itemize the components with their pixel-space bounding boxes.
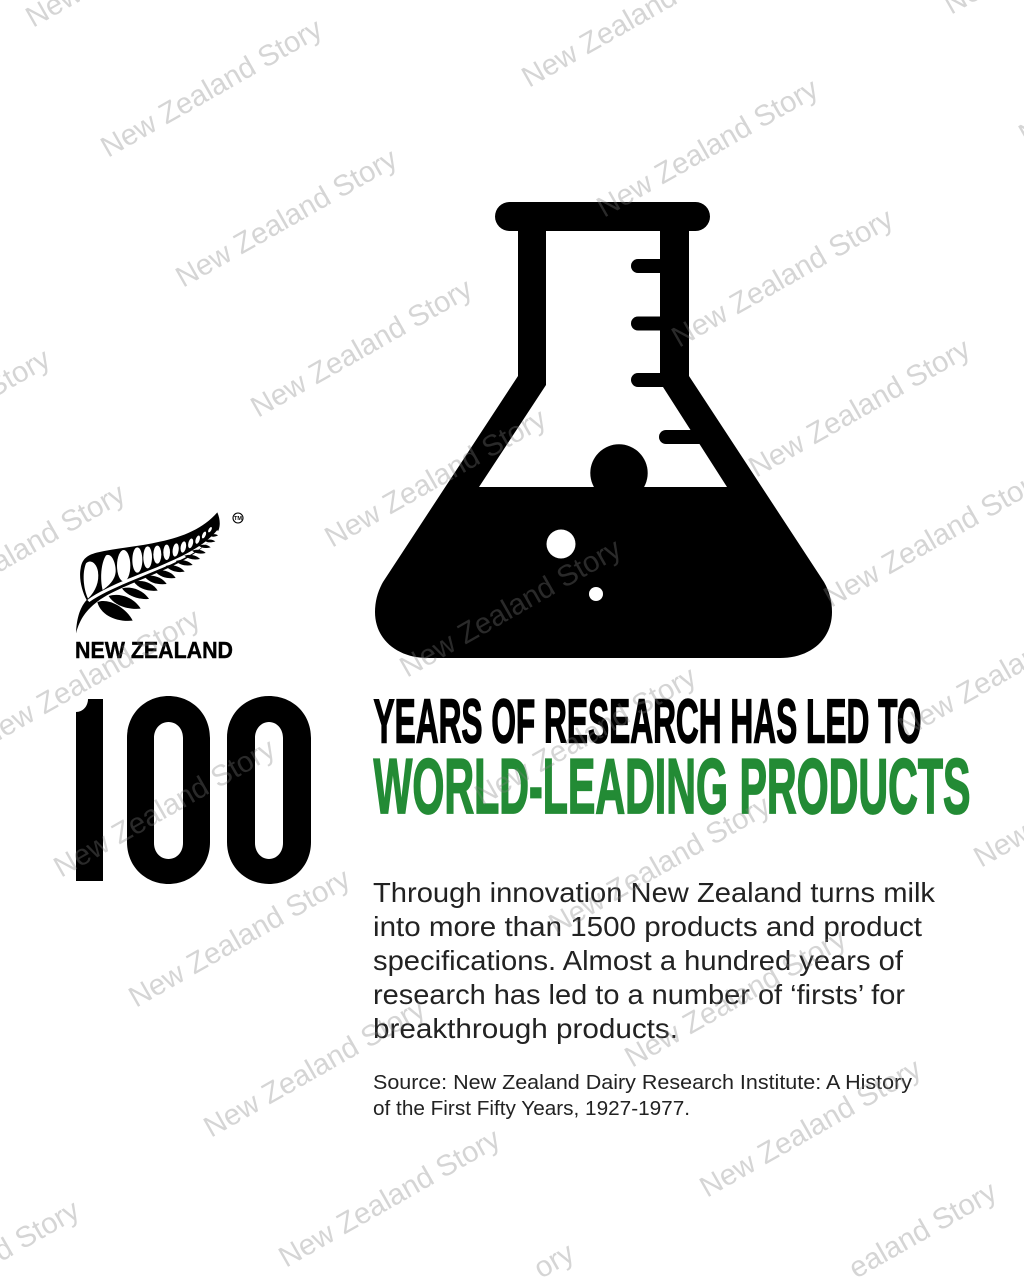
watermark pattern: New Zealand Story — [591, 72, 824, 224]
watermark pattern: New Zealand Story — [123, 862, 356, 1014]
trademark symbol — [233, 513, 243, 523]
watermark pattern: New Zealand Story — [245, 272, 478, 424]
logo wordmark: NEW ZEALAND — [75, 637, 233, 663]
big number 100 — [76, 696, 311, 884]
watermark pattern: New Zealand Story — [743, 332, 976, 484]
body text: specifications. Almost a hundred years of — [373, 945, 903, 976]
watermark pattern: New Zealand Story — [170, 142, 403, 294]
watermark pattern: New Zealand Story — [469, 660, 702, 812]
body text — [373, 877, 935, 1044]
watermark pattern: New Zealand Story — [394, 532, 627, 684]
watermark pattern: New Zealand Story — [198, 992, 431, 1144]
body text: breakthrough products. — [373, 1013, 678, 1044]
heading — [374, 686, 970, 830]
watermark pattern: New Zealand Story — [666, 202, 899, 354]
watermark pattern: New Zealand Story — [48, 732, 281, 884]
icon: laboratory flask — [375, 202, 832, 658]
body text: Through innovation New Zealand turns milk — [373, 877, 935, 908]
body text: research has led to a number of ‘firsts’ for — [373, 979, 905, 1010]
body text: into more than 1500 products and product — [373, 911, 922, 942]
source note: of the First Fifty Years, 1927-1977. — [373, 1097, 690, 1120]
source note — [373, 1071, 913, 1120]
trademark symbol: TM — [234, 516, 242, 522]
source note: Source: New Zealand Dairy Research Institute: A History — [373, 1071, 913, 1094]
watermark pattern: New Zealand Story — [543, 789, 776, 941]
watermark pattern: New Zealand Story — [694, 1052, 927, 1204]
watermark pattern: New Zealand Story — [273, 1122, 506, 1274]
watermark pattern: New Zealand Story — [619, 922, 852, 1074]
watermark pattern: New Zealand Story — [95, 12, 328, 164]
watermark pattern: New Zealand Story — [319, 402, 552, 554]
logo: silver fern New Zealand — [75, 512, 243, 663]
icon: silver fern — [76, 512, 220, 633]
